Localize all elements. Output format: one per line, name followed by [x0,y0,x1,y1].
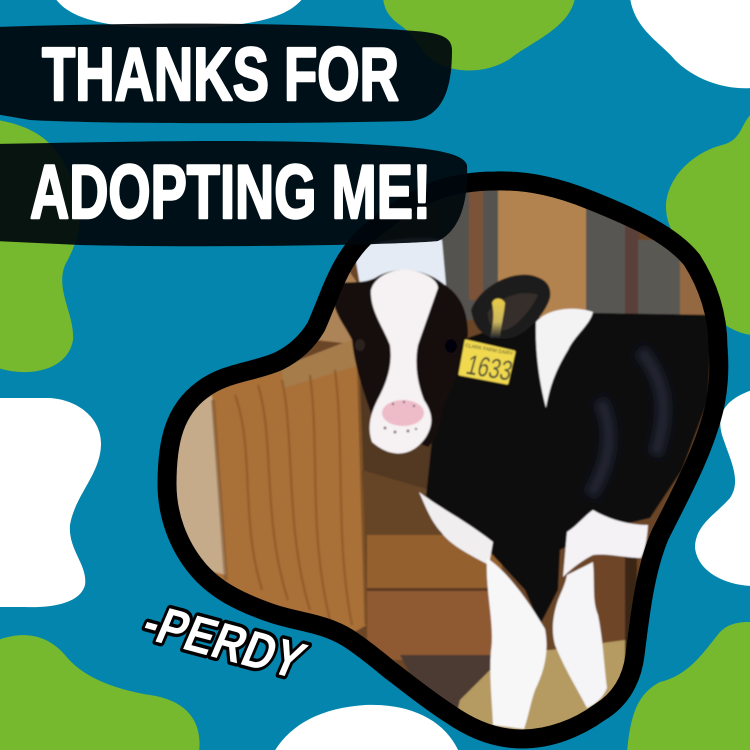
photo of calf in blob frame [160,170,730,750]
title backing bar 2 [0,141,467,246]
ear tag: CLARK FARM DAIRY [465,343,514,357]
wood grain [213,350,366,625]
calf fur sheen [590,350,663,495]
calf nose [382,400,424,426]
nose freckles [384,401,417,434]
photo: barn and calf [176,190,710,730]
title backing bar 1 [0,24,452,123]
ear tag [460,341,516,386]
title line 2: ADOPTING ME! [30,150,431,235]
ear tag: 1633 [463,349,516,386]
black frame outline [167,181,719,739]
calf white blaze [370,270,438,453]
calf rear leg [553,562,607,708]
title line 1: THANKS FOR [42,32,399,116]
calf front leg [487,558,547,729]
ear tag stem [490,298,505,338]
signature: -PERDY [134,594,314,690]
calf body [426,313,712,625]
calf eyes [355,339,457,353]
calf shoulder patch [536,309,593,408]
calf belly patch [563,510,648,577]
calf chest patch [419,492,493,565]
barn wall [176,190,710,730]
calf ear [471,275,550,338]
calf head [332,270,468,447]
